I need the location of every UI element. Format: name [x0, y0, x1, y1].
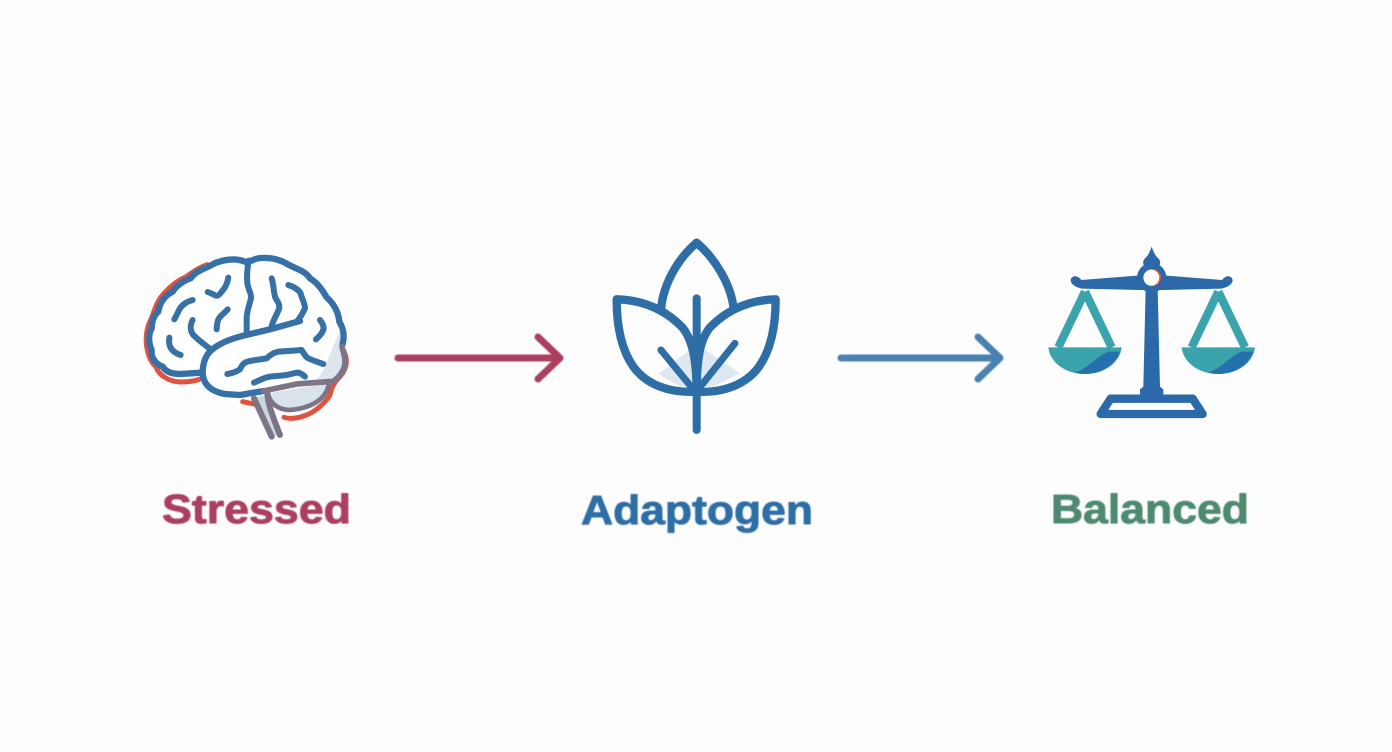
beam [1071, 275, 1233, 290]
pivot [1137, 263, 1166, 292]
label: Balanced: Balanced [1051, 486, 1249, 532]
right pan [1182, 292, 1255, 374]
label: Stressed: Stressed [162, 486, 351, 532]
finial [1143, 247, 1160, 268]
brain sulci [169, 261, 324, 383]
icon: brain [146, 258, 346, 437]
label: Adaptogen: Adaptogen [581, 487, 813, 533]
post [1140, 288, 1163, 398]
icon: balance scales [1048, 247, 1255, 414]
icon: leaf [617, 243, 776, 430]
left pan [1048, 292, 1122, 374]
base [1101, 399, 1203, 414]
arrow: stressed to adaptogen [398, 337, 560, 379]
arrow: adaptogen to balanced [841, 337, 1000, 379]
